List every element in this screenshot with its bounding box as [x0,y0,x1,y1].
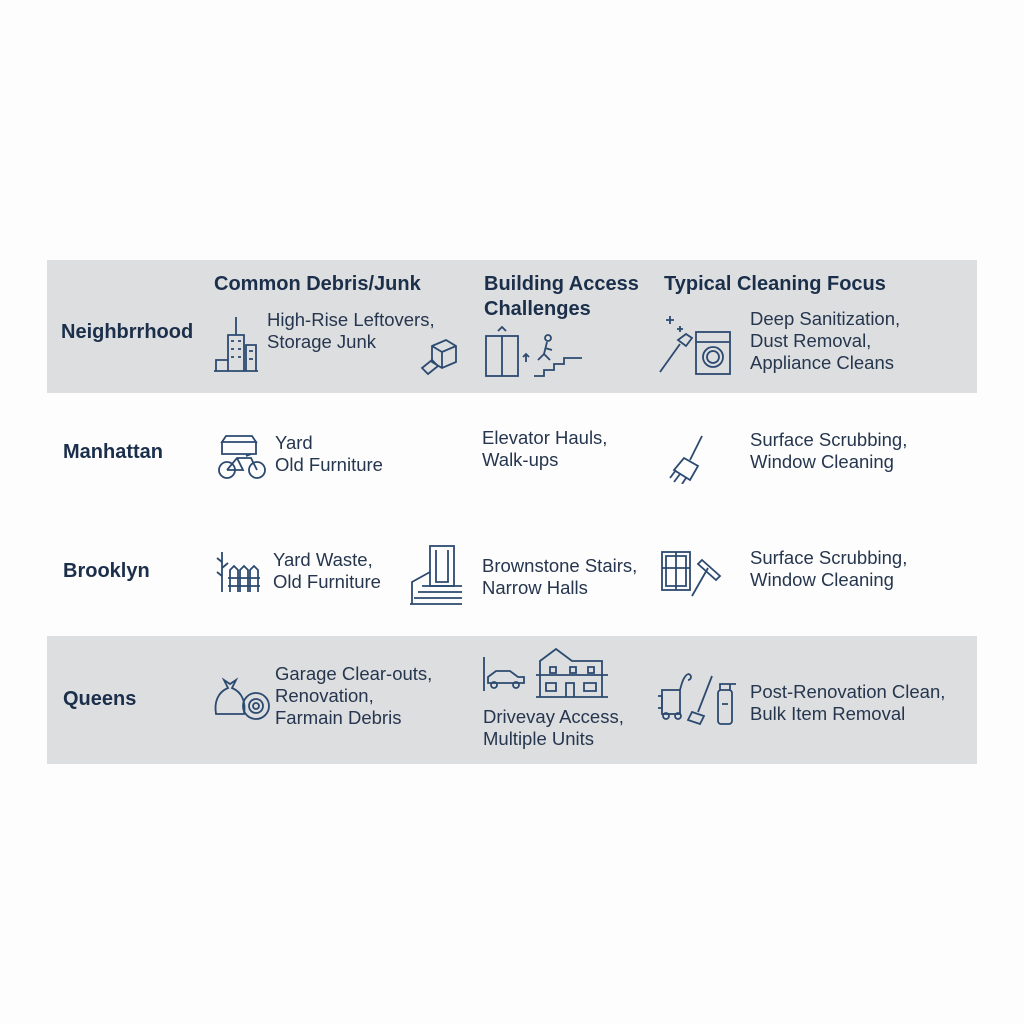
text: high-rise leftovers: Storage Junk [267,331,376,352]
text: surface scrubbing 2: Window Cleaning [750,569,894,590]
text: surface scrubbing 2 [750,547,907,590]
row label: manhattan: Manhattan [63,441,163,463]
text: driveway access: Drivevay Access, [483,706,624,727]
text: deep sanitization: Deep Sanitization, [750,308,900,329]
icon: bag + tire [214,678,270,720]
text: driveway access [483,706,624,749]
icon: fence + plant [216,552,260,592]
header: neighborhood: Neighbrrhood [61,321,193,343]
header: common debris: Common Debris/Junk [214,273,421,295]
icon: window + squeegee [661,551,722,596]
row label: queens: Queens [63,688,136,710]
header: building access [484,273,639,320]
text: deep sanitization: Appliance Cleans [750,352,894,373]
icon: bike [218,435,266,479]
header band [47,260,977,393]
icon: elevator + stairs [485,326,582,377]
text: deep sanitization: Dust Removal, [750,330,871,351]
text: yard waste: Yard Waste, [273,549,373,570]
icon: car + house [483,648,608,698]
header: building access: Challenges [484,298,591,320]
text: garage clear-outs: Farmain Debris [275,707,401,728]
icon: box [420,339,457,376]
text: surface scrubbing [750,429,907,472]
text: yard waste [273,549,381,592]
icon: brownstone stoop [410,545,462,605]
text: garage clear-outs: Renovation, [275,685,374,706]
text: high-rise leftovers [267,309,435,352]
header: cleaning focus: Typical Cleaning Focus [664,273,886,295]
text: driveway access: Multiple Units [483,728,594,749]
icon: duster + washer [659,316,731,375]
text: brownstone stairs [482,555,637,598]
text: post-renovation: Post-Renovation Clean, [750,681,945,702]
text: elevator hauls [482,427,607,470]
queens band [47,636,977,764]
icon: high-rise [214,317,258,372]
text: surface scrubbing 2: Surface Scrubbing, [750,547,907,568]
text: yard old furniture: Yard [275,432,313,453]
text: yard old furniture [275,432,383,475]
text: yard old furniture: Old Furniture [275,454,383,475]
text: surface scrubbing: Window Cleaning [750,451,894,472]
text: elevator hauls: Walk-ups [482,449,558,470]
text: yard waste: Old Furniture [273,571,381,592]
icon: scrub brush [669,436,703,484]
text: garage clear-outs [275,663,432,728]
row label: brooklyn: Brooklyn [63,560,150,582]
text: surface scrubbing: Surface Scrubbing, [750,429,907,450]
text: high-rise leftovers: High-Rise Leftovers, [267,309,435,330]
header: building access: Building Access [484,273,639,295]
text: post-renovation [750,681,945,724]
text: garage clear-outs: Garage Clear-outs, [275,663,432,684]
text: deep sanitization [750,308,900,373]
text: post-renovation: Bulk Item Removal [750,703,905,724]
text: brownstone stairs: Narrow Halls [482,577,588,598]
text: brownstone stairs: Brownstone Stairs, [482,555,637,576]
icon: vacuum broom spray [658,673,736,726]
text: elevator hauls: Elevator Hauls, [482,427,607,448]
